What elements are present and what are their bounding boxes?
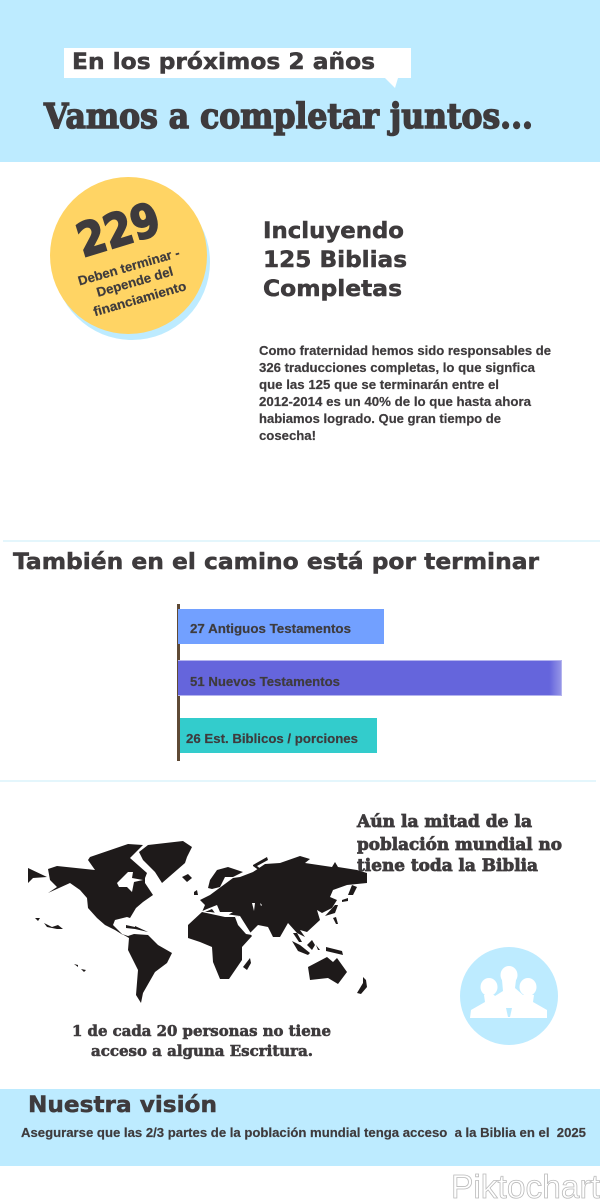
panel: yellow stat circle — [50, 177, 210, 340]
section heading: También en el camino está por terminar — [13, 550, 539, 575]
bar: Antiguos Testamentos — [178, 609, 384, 644]
bar: Nuevos Testamentos — [178, 660, 562, 696]
world map — [28, 841, 367, 1003]
map water cutouts — [117, 872, 262, 935]
circle caption: Deben terminar - — [76, 245, 181, 288]
panel: vision — [0, 1089, 600, 1166]
heading: 125 Biblias — [263, 219, 407, 302]
heading: half of the population: población mundial no — [357, 835, 562, 855]
heading: half of the population — [356, 812, 562, 876]
vision heading: Nuestra visión — [28, 1093, 217, 1118]
title: Vamos a completar juntos... — [43, 96, 533, 137]
bar chart — [177, 604, 562, 761]
circle caption — [76, 245, 188, 319]
map caption — [72, 1022, 331, 1060]
heading: half of the population: Aún la mitad de la — [356, 812, 532, 832]
paragraph — [259, 344, 551, 443]
map caption: 1 de cada 20 personas no tiene — [72, 1022, 331, 1040]
bar: Nuevos Testamentos: 51 Nuevos Testamentos — [190, 674, 340, 689]
heading: half of the population: tiene toda la Biblia — [357, 856, 538, 876]
bar: Antiguos Testamentos: 27 Antiguos Testamentos — [190, 621, 351, 636]
vision text: Asegurarse que las 2/3 partes de la población mundial tenga acceso a la Biblia en el 2025 — [21, 1125, 586, 1140]
speech bubble: En los próximos 2 años — [72, 50, 375, 75]
panel: header — [0, 0, 600, 162]
bar: Est. Biblicos — [180, 718, 377, 753]
icon: people — [460, 947, 558, 1045]
heading: 125 Biblias: 125 Biblias — [263, 248, 407, 273]
heading: 125 Biblias: Completas — [263, 277, 402, 302]
heading: 125 Biblias: Incluyendo — [263, 219, 404, 244]
paragraph: Como fraternidad hemos sido responsables de — [259, 344, 551, 358]
bar: Est. Biblicos: 26 Est. Biblicos / porciones — [186, 731, 358, 746]
big number 229: 229 — [70, 192, 166, 268]
paragraph: habiamos logrado. Que gran tiempo de — [259, 412, 501, 426]
paragraph: que las 125 que se terminarán entre el — [259, 378, 499, 392]
speech bubble — [64, 48, 411, 88]
map caption: acceso a alguna Escritura. — [91, 1042, 313, 1060]
circle caption: financiamiento — [92, 278, 188, 319]
paragraph: 326 traducciones completas, lo que signfica — [259, 361, 536, 375]
paragraph: 2012-2014 es un 40% de lo que hasta ahora — [259, 395, 532, 409]
paragraph: cosecha! — [259, 429, 316, 443]
circle caption: Depende del — [95, 264, 175, 300]
